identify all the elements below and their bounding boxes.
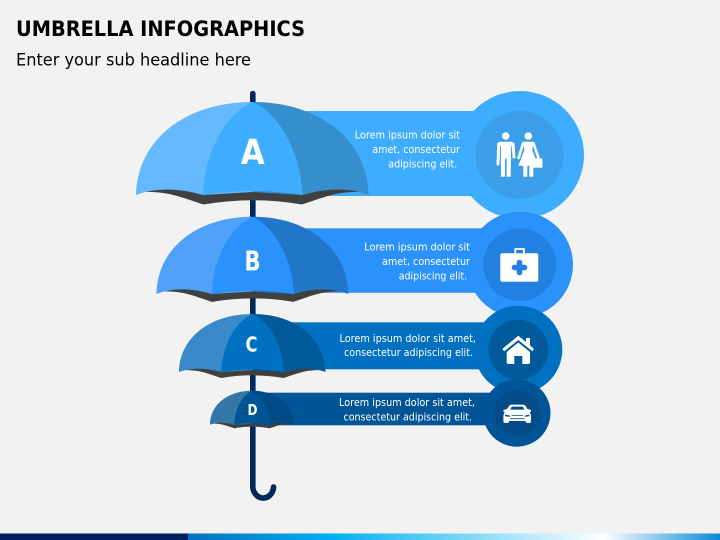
icon: car: [503, 405, 531, 423]
text: banner B: Lorem ipsum dolor sit: [364, 242, 470, 254]
icon circle D: [494, 390, 540, 436]
panel: banner A: [290, 91, 584, 219]
umbrella A: [136, 102, 369, 204]
letter B: B: [244, 246, 260, 278]
letter C: C: [246, 333, 258, 357]
icon: medical kit: [500, 249, 538, 282]
text: banner B: [364, 242, 471, 282]
footer bar: [0, 534, 720, 540]
text: banner A: adipiscing elit.: [388, 158, 457, 170]
letter D: D: [248, 401, 258, 419]
umbrella C: [179, 314, 326, 378]
text: banner A: Lorem ipsum dolor sit: [355, 130, 460, 142]
text: banner B: adipiscing elit.: [399, 270, 467, 282]
text: banner D: Lorem ipsum dolor sit amet,: [339, 397, 475, 409]
center panel A: [203, 102, 303, 195]
umbrella handle: [253, 94, 274, 498]
sub headline: Enter your sub headline here: [16, 51, 251, 71]
text: banner A: [355, 130, 461, 170]
icon: house: [502, 336, 534, 364]
icon circle A: [476, 111, 564, 199]
title: UMBRELLA INFOGRAPHICS: [16, 17, 305, 41]
panel: banner C: [270, 306, 562, 394]
panel: banner B: [290, 212, 573, 318]
text: banner D: consectetur adipiscing elit.: [344, 411, 472, 423]
umbrella B: [156, 217, 348, 302]
panel: banner D: [265, 379, 550, 447]
umbrella D: [210, 391, 294, 428]
text: banner A: amet, consectetur: [372, 144, 461, 156]
icon: people: [498, 132, 542, 177]
icon circle B: [483, 228, 556, 301]
letter A: A: [241, 133, 265, 173]
text: banner C: Lorem ipsum dolor sit amet,: [340, 333, 476, 345]
text: banner D: [339, 397, 475, 423]
text: banner C: [340, 333, 476, 359]
icon circle C: [488, 320, 548, 380]
text: banner C: consectetur adipiscing elit.: [344, 347, 473, 359]
text: banner B: amet, consectetur: [382, 256, 471, 268]
